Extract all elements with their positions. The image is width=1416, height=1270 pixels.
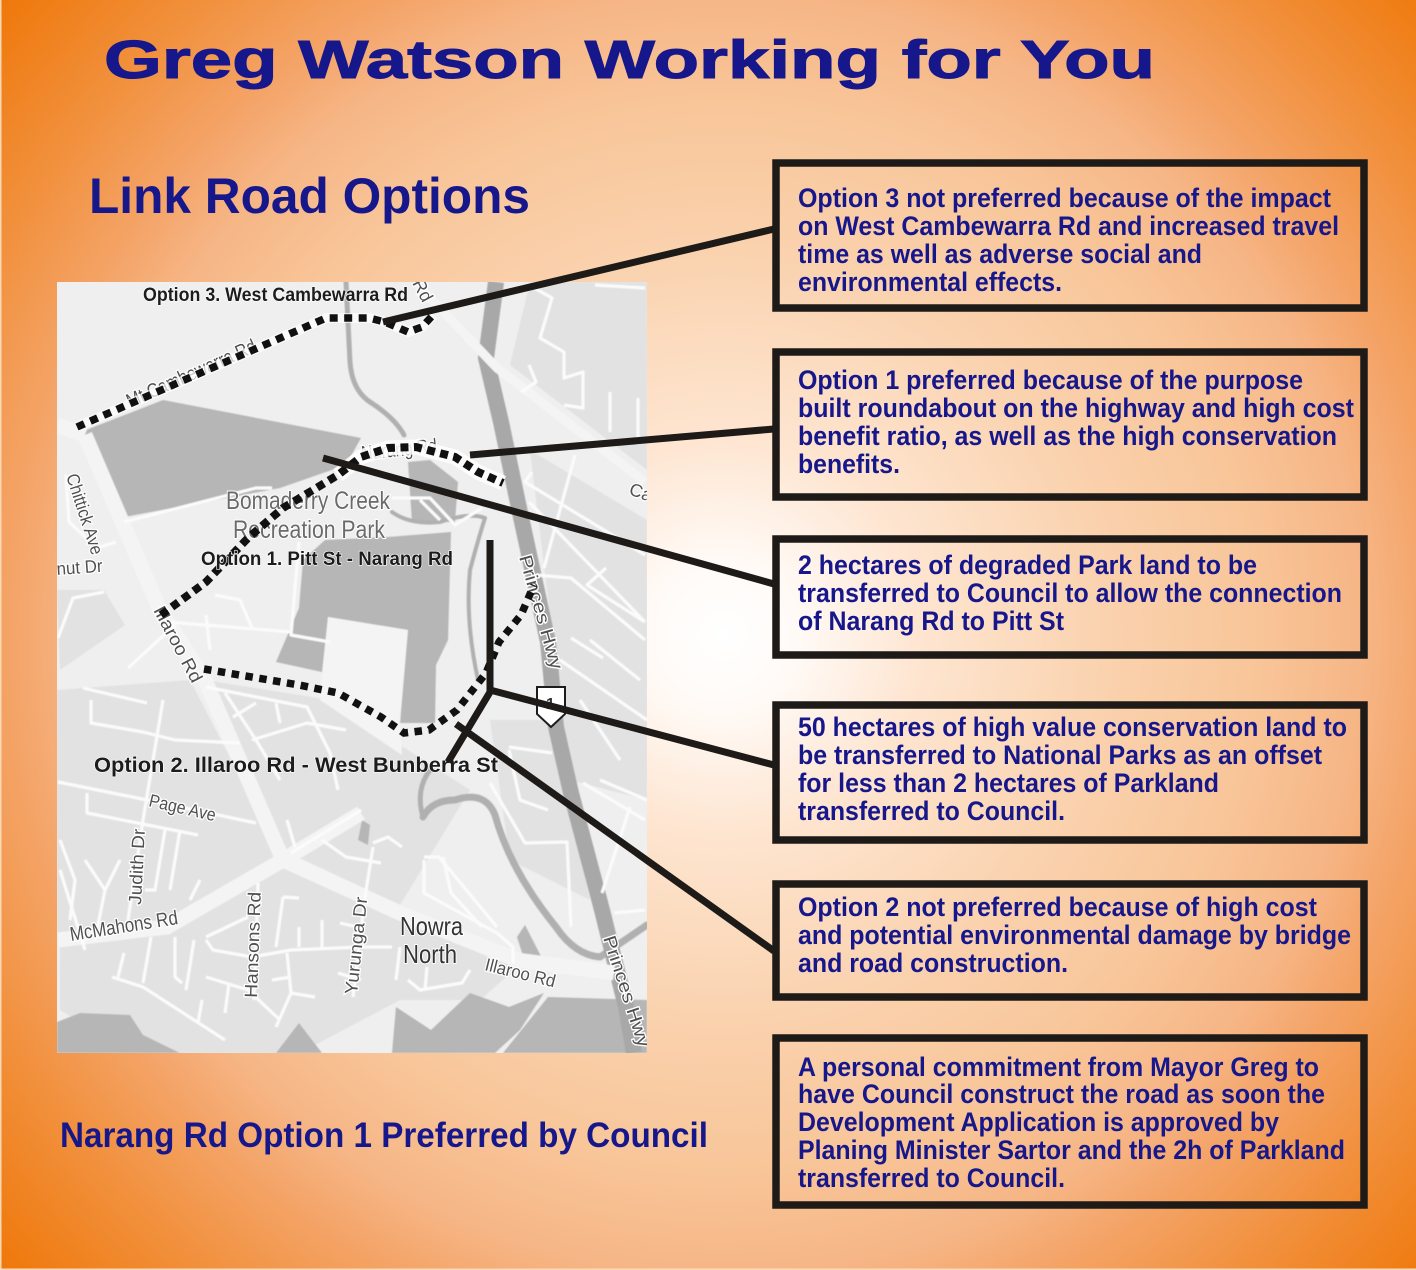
box: personal commitment: A personal commitment from Mayor Greg to	[798, 1052, 1319, 1082]
icon: highway shield	[537, 687, 565, 727]
princes highway	[486, 282, 634, 1053]
label: option 3: Option 3. West Cambewarra Rd	[143, 285, 408, 306]
leader lines	[323, 229, 774, 951]
local streets	[58, 285, 647, 1040]
map label: Rd: Rd	[408, 275, 437, 305]
map label: Judith Dr: Judith Dr	[125, 828, 149, 905]
parkland blocks	[57, 400, 647, 1053]
box: option 2: and potential environmental damage by bridge	[798, 920, 1351, 950]
map panel	[56, 275, 656, 1053]
box: personal commitment: Development Application is approved by	[798, 1107, 1279, 1137]
route: option 2	[204, 585, 534, 733]
shaded residential areas	[57, 282, 647, 1053]
box: option 3: Option 3 not preferred because of the impact	[798, 183, 1331, 213]
box: personal commitment: have Council construct the road as soon the	[798, 1079, 1325, 1109]
box: option 3: on West Cambewarra Rd and increased travel	[798, 211, 1339, 241]
map label: Ca: Ca	[627, 479, 656, 506]
major roads	[57, 343, 616, 981]
box: conservation land: be transferred to National Parks as an offset	[798, 740, 1322, 770]
box: option 2: Option 2 not preferred because of high cost	[798, 892, 1317, 922]
map label: Illaroo Rd upper: Illaroo Rd	[149, 602, 207, 686]
box: option 3: time as well as adverse social and	[798, 239, 1202, 269]
box: conservation land: for less than 2 hectares of Parkland	[798, 768, 1219, 798]
map label: Page Ave: Page Ave	[147, 790, 218, 825]
box: conservation land	[776, 705, 1364, 840]
box: conservation land: 50 hectares of high value conservation land to	[798, 712, 1347, 742]
icon: highway shield: 1	[546, 696, 555, 713]
map label: Narang Rd: Narang Rd	[360, 435, 438, 465]
box: degraded park land: of Narang Rd to Pitt St	[798, 606, 1064, 636]
box: degraded park land: transferred to Council to allow the connection	[798, 578, 1342, 608]
map label: Recreation Park: Recreation Park	[233, 516, 385, 544]
heading: link road options: Link Road Options	[89, 168, 530, 224]
title: Greg Watson Working for You	[104, 30, 1155, 90]
route: option 3	[77, 315, 433, 427]
map base layers	[57, 282, 647, 1053]
box: personal commitment: Planing Minister Sartor and the 2h of Parkland	[798, 1135, 1345, 1165]
caption: Narang Rd Option 1 Preferred by Council	[60, 1116, 708, 1155]
box: personal commitment: transferred to Council.	[798, 1163, 1065, 1193]
map label: Nowra: Nowra	[400, 911, 463, 941]
map label: Bomaderry Creek: Bomaderry Creek	[226, 487, 390, 515]
box: option 1	[776, 352, 1364, 497]
box: option 1: built roundabout on the highway and high cost	[798, 393, 1354, 423]
box: degraded park land: 2 hectares of degraded Park land to be	[798, 550, 1257, 580]
box: option 1: benefits.	[798, 449, 900, 479]
box: option 2: and road construction.	[798, 948, 1068, 978]
box: option 3	[776, 163, 1364, 308]
map label: Yurunga Dr: Yurunga Dr	[341, 896, 371, 995]
map label: Princes Hwy upper: Princes Hwy	[515, 553, 567, 672]
box: degraded park land	[776, 539, 1364, 655]
map label: Chittick Ave: Chittick Ave	[62, 471, 107, 557]
box: conservation land: transferred to Council.	[798, 796, 1065, 826]
box: option 1: Option 1 preferred because of the purpose	[798, 365, 1303, 395]
map label: Princes Hwy lower: Princes Hwy	[599, 933, 654, 1050]
map label: Hansons Rd: Hansons Rd	[241, 892, 265, 998]
creek	[346, 282, 647, 957]
label: option 2: Option 2. Illaroo Rd - West Bunberra St	[94, 754, 498, 777]
box: option 2	[776, 884, 1364, 997]
box: option 3: environmental effects.	[798, 267, 1062, 297]
map label: nut Dr: nut Dr	[56, 556, 103, 579]
white park interior	[320, 617, 408, 755]
map label: McMahons Rd: McMahons Rd	[68, 907, 179, 946]
box: personal commitment	[776, 1038, 1364, 1205]
label: option 1: Option 1. Pitt St - Narang Rd	[201, 549, 453, 570]
map label: Mt Cambewarra Rd: Mt Cambewarra Rd	[123, 336, 260, 413]
map label: Illaroo Rd lower: Illaroo Rd	[483, 954, 558, 991]
box: option 1: benefit ratio, as well as the high conservation	[798, 421, 1337, 451]
route: option 1	[161, 447, 503, 615]
map label: North: North	[403, 939, 457, 969]
